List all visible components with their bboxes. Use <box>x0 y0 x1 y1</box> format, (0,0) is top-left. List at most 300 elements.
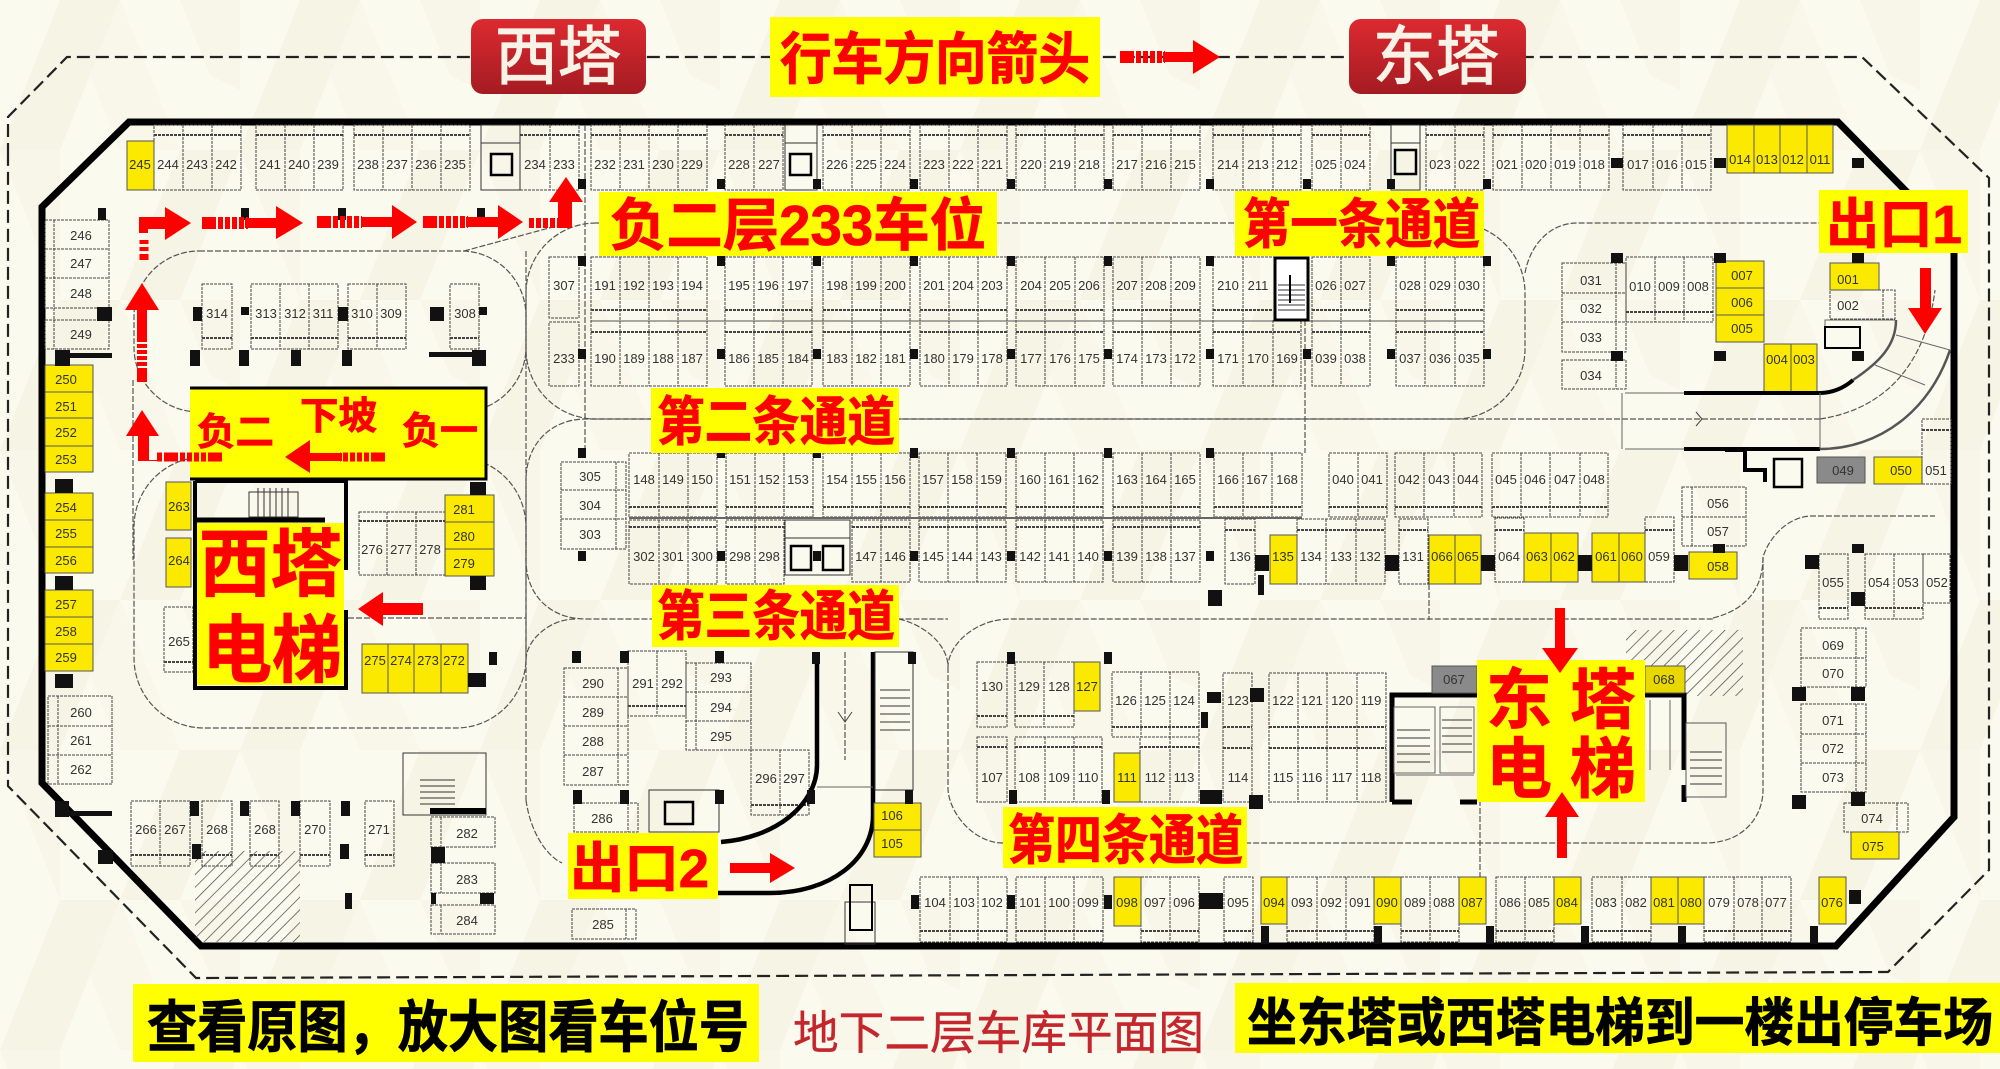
parking double row: 307-030 and 233-035: 171 <box>1217 351 1239 366</box>
parking column: west wall 246-262: 251 <box>55 399 77 414</box>
parking row: 305-048: 151 <box>729 472 751 487</box>
parking row: 302-059: 064 <box>1498 549 1520 564</box>
parking double row: 307-030 and 233-035: 177 <box>1020 351 1042 366</box>
parking double row: 307-030 and 233-035: 186 <box>728 351 750 366</box>
parking block: 114-123: 120 <box>1331 693 1353 708</box>
parking row: 302-059: 147 <box>855 549 877 564</box>
parking island: 308-314: 313 <box>255 306 277 321</box>
parking double row: 307-030 and 233-035: 188 <box>652 351 674 366</box>
parking double row: 307-030 and 233-035: 187 <box>681 351 703 366</box>
parking row: top 245-011: 238 <box>357 157 379 172</box>
parking area: west tower 263-281: 265 <box>168 634 190 649</box>
parking row: top 245-011: 213 <box>1247 157 1269 172</box>
parking island: 308-314: 311 <box>313 306 333 321</box>
parking row: top 245-011: 223 <box>923 157 945 172</box>
parking row: top 245-011: 022 <box>1458 157 1480 172</box>
parking double row: 307-030 and 233-035: 184 <box>787 351 809 366</box>
parking area: east side 049-058, 069-075: 058 <box>1707 559 1729 574</box>
parking row: 305-048: 161 <box>1048 472 1070 487</box>
parking area: east side 049-058, 069-075: 073 <box>1822 770 1844 785</box>
parking row: top 245-011: 023 <box>1429 157 1451 172</box>
parking row: top 245-011: 237 <box>386 157 408 172</box>
parking row: top 245-011: 016 <box>1656 157 1678 172</box>
parking column: west wall 246-262: 247 <box>70 256 92 271</box>
parking row: 305-048: 042 <box>1398 472 1420 487</box>
parking row: 302-059: 062 <box>1553 549 1575 564</box>
parking row: 302-059: 143 <box>980 549 1002 564</box>
parking row: bottom 104-076: 080 <box>1680 895 1702 910</box>
parking area: north-east 001-010, 031-034: 002 <box>1837 298 1859 313</box>
parking row: top 245-011: 224 <box>884 157 906 172</box>
parking row: 302-059: 061 <box>1595 549 1617 564</box>
parking row: 305-048: 304 <box>579 498 601 513</box>
parking area: centre-west 286-297: 295 <box>710 729 732 744</box>
parking area: centre-south 105-130: 106 <box>881 808 903 823</box>
parking area: east side 049-058, 069-075: 070 <box>1822 666 1844 681</box>
parking double row: 307-030 and 233-035: 210 <box>1217 278 1239 293</box>
parking row: 302-059: 298 <box>758 549 780 564</box>
parking row: top 245-011: 024 <box>1344 157 1366 172</box>
parking column: west wall 246-262: 254 <box>55 500 77 515</box>
parking double row: 307-030 and 233-035: 192 <box>623 278 645 293</box>
parking double row: 307-030 and 233-035: 193 <box>652 278 674 293</box>
parking double row: 307-030 and 233-035: 181 <box>884 351 906 366</box>
parking row: 302-059: 136 <box>1229 549 1251 564</box>
parking row: 305-048: 048 <box>1583 472 1605 487</box>
parking double row: 307-030 and 233-035: 029 <box>1429 278 1451 293</box>
parking area: east side 049-058, 069-075: 055 <box>1822 575 1844 590</box>
parking row: 305-048: 045 <box>1495 472 1517 487</box>
parking area: centre-west 286-297: 286 <box>591 811 613 826</box>
parking row: 302-059: 298 <box>729 549 751 564</box>
structural columns <box>55 158 1865 944</box>
parking area: centre-south 105-130: 110 <box>1078 770 1098 785</box>
parking double row: 307-030 and 233-035: 189 <box>623 351 645 366</box>
parking row: 305-048: 167 <box>1246 472 1268 487</box>
parking double row: 307-030 and 233-035: 203 <box>981 278 1003 293</box>
parking row: top 245-011: 018 <box>1583 157 1605 172</box>
parking double row: 307-030 and 233-035: 180 <box>923 351 945 366</box>
parking row: top 245-011: 012 <box>1782 152 1804 167</box>
parking row: 302-059: 060 <box>1621 549 1643 564</box>
parking area: centre-south 105-130: 105 <box>881 836 903 851</box>
parking row: bottom 104-076: 099 <box>1077 895 1099 910</box>
parking double row: 307-030 and 233-035: 190 <box>594 351 616 366</box>
parking row: 302-059: 146 <box>884 549 906 564</box>
parking island: 308-314: 314 <box>206 306 228 321</box>
parking double row: 307-030 and 233-035: 196 <box>757 278 779 293</box>
parking row: top 245-011: 234 <box>524 157 546 172</box>
parking double row: 307-030 and 233-035: 176 <box>1049 351 1071 366</box>
parking area: north-east 001-010, 031-034: 007 <box>1731 268 1753 283</box>
parking row: top 245-011: 019 <box>1554 157 1576 172</box>
parking double row: 307-030 and 233-035: 307 <box>553 278 575 293</box>
parking block: 114-123: 119 <box>1361 693 1381 708</box>
label: aisle 2: 第二条通道 <box>657 393 895 452</box>
parking row: top 245-011: 243 <box>186 157 208 172</box>
parking area: centre-west 286-297: 294 <box>710 700 732 715</box>
parking double row: 307-030 and 233-035: 028 <box>1399 278 1421 293</box>
parking row: 305-048: 160 <box>1019 472 1041 487</box>
parking row: 305-048: 305 <box>579 469 601 484</box>
parking island: 308-314: 312 <box>284 306 306 321</box>
label: east tower lift: 东塔 <box>1486 663 1636 737</box>
parking row: top 245-011: 013 <box>1756 152 1778 167</box>
parking row: bottom 104-076: 086 <box>1499 895 1521 910</box>
parking row: 305-048: 159 <box>980 472 1002 487</box>
parking area: centre-south 105-130: 129 <box>1018 679 1040 694</box>
parking double row: 307-030 and 233-035: 036 <box>1429 351 1451 366</box>
parking row: 305-048: 162 <box>1077 472 1099 487</box>
parking area: east side 049-058, 069-075: 054 <box>1868 575 1890 590</box>
parking area: west tower 263-281: 276 <box>361 542 383 557</box>
parking area: west tower 263-281: 280 <box>453 529 475 544</box>
parking row: 305-048: 040 <box>1332 472 1354 487</box>
parking double row: 307-030 and 233-035: 204 <box>952 278 974 293</box>
parking area: centre-south 105-130: 124 <box>1173 693 1195 708</box>
parking double row: 307-030 and 233-035: 039 <box>1315 351 1337 366</box>
parking column: west wall 246-262: 259 <box>55 650 77 665</box>
parking area: north-east 001-010, 031-034: 008 <box>1687 279 1709 294</box>
route arrow: corner turn <box>139 207 191 260</box>
parking row: top 245-011: 229 <box>681 157 703 172</box>
parking row: 305-048: 164 <box>1145 472 1167 487</box>
parking area: west tower 263-281: 273 <box>417 653 439 668</box>
parking row: 305-048: 155 <box>855 472 877 487</box>
parking double row: 307-030 and 233-035: 183 <box>826 351 848 366</box>
parking double row: 307-030 and 233-035: 207 <box>1116 278 1138 293</box>
parking row: 302-059: 065 <box>1457 549 1479 564</box>
parking row: top 245-011: 232 <box>594 157 616 172</box>
parking row: 305-048: 163 <box>1116 472 1138 487</box>
parking area: centre-west 286-297: 289 <box>582 705 604 720</box>
parking column: west wall 246-262: 257 <box>55 597 77 612</box>
parking area: centre-west 286-297 <box>564 651 809 832</box>
parking area: east side 049-058, 069-075: 056 <box>1707 496 1729 511</box>
parking area: west tower 263-281: 264 <box>168 553 190 568</box>
parking row: 305-048: 156 <box>884 472 906 487</box>
parking row: top 245-011: 011 <box>1810 152 1830 167</box>
parking area: south-west 266-284: 283 <box>456 872 478 887</box>
parking row: bottom 104-076: 096 <box>1173 895 1195 910</box>
parking area: east side 049-058, 069-075: 051 <box>1925 463 1947 478</box>
parking area: north-east 001-010, 031-034 <box>1562 257 1895 392</box>
label: east tower lift: 电梯 <box>1486 732 1636 806</box>
parking row: 302-059: 134 <box>1300 549 1322 564</box>
parking double row: 307-030 and 233-035: 200 <box>884 278 906 293</box>
parking row: bottom 104-076: 103 <box>953 895 975 910</box>
parking area: north-east 001-010, 031-034: 032 <box>1580 301 1602 316</box>
arrow: to west tower lift <box>358 592 423 626</box>
legend arrow <box>1120 40 1220 74</box>
parking area: east side 049-058, 069-075: 053 <box>1897 575 1919 590</box>
parking double row: 307-030 and 233-035: 174 <box>1116 351 1138 366</box>
label: west tower lift: 电梯 <box>202 609 342 692</box>
parking row: top 245-011: 240 <box>288 157 310 172</box>
parking row: top 245-011: 219 <box>1049 157 1071 172</box>
parking area: west tower 263-281: 279 <box>453 556 475 571</box>
parking area: centre-south 105-130: 109 <box>1048 770 1070 785</box>
parking row: 305-048: 168 <box>1276 472 1298 487</box>
parking row: 305-048: 154 <box>826 472 848 487</box>
parking area: centre-west 286-297: 290 <box>582 676 604 691</box>
parking double row: 307-030 and 233-035: 173 <box>1145 351 1167 366</box>
parking double row: 307-030 and 233-035: 172 <box>1174 351 1196 366</box>
parking row: top 245-011: 245 <box>129 157 151 172</box>
parking row: top 245-011: 230 <box>652 157 674 172</box>
parking row: bottom 104-076: 102 <box>981 895 1003 910</box>
parking area: east side 049-058, 069-075: 052 <box>1926 575 1948 590</box>
parking row: bottom 104-076: 090 <box>1376 895 1398 910</box>
lift and stair cores <box>195 125 1802 944</box>
parking row: 302-059: 133 <box>1330 549 1352 564</box>
parking area: north-east 001-010, 031-034: 006 <box>1731 295 1753 310</box>
parking row: top 245-011: 021 <box>1496 157 1518 172</box>
parking column: west wall 246-262: 249 <box>70 327 92 342</box>
parking column: west wall 246-262: 248 <box>70 286 92 301</box>
east tower badge <box>1349 19 1526 94</box>
parking area: north-east 001-010, 031-034: 003 <box>1793 352 1815 367</box>
parking row: top 245-011: 225 <box>855 157 877 172</box>
parking double row: 307-030 and 233-035: 026 <box>1315 278 1337 293</box>
parking area: west tower 263-281: 281 <box>453 502 475 517</box>
route arrow: up from ramp <box>125 283 159 383</box>
parking row: 305-048: 165 <box>1174 472 1196 487</box>
parking area: east side 049-058, 069-075: 072 <box>1822 741 1844 756</box>
parking area: west tower 263-281: 263 <box>168 499 190 514</box>
parking area: centre-south 105-130: 113 <box>1174 770 1194 785</box>
parking row: top 245-011 <box>127 125 1833 190</box>
parking area: south-west 266-284: 266 <box>135 822 157 837</box>
parking row: bottom 104-076: 101 <box>1019 895 1041 910</box>
parking column: west wall 246-262: 260 <box>70 705 92 720</box>
parking row: bottom 104-076: 081 <box>1653 895 1675 910</box>
parking row: bottom 104-076: 084 <box>1556 895 1578 910</box>
parking row: top 245-011: 236 <box>415 157 437 172</box>
parking double row: 307-030 and 233-035: 027 <box>1344 278 1366 293</box>
parking double row: 307-030 and 233-035: 169 <box>1276 351 1298 366</box>
parking area: north-east 001-010, 031-034: 001 <box>1837 272 1859 287</box>
parking column: west wall 246-262 <box>45 220 112 784</box>
parking column: west wall 246-262: 258 <box>55 624 77 639</box>
parking row: top 245-011: 226 <box>826 157 848 172</box>
parking row: 305-048: 149 <box>662 472 684 487</box>
label: west tower lift: 西塔 <box>199 523 342 606</box>
parking double row: 307-030 and 233-035: 182 <box>855 351 877 366</box>
parking row: 305-048: 166 <box>1217 472 1239 487</box>
parking double row: 307-030 and 233-035: 199 <box>855 278 877 293</box>
parking area: centre-south 105-130: 126 <box>1115 693 1137 708</box>
parking area: east side 049-058, 069-075: 071 <box>1822 713 1844 728</box>
parking row: bottom 104-076: 082 <box>1625 895 1647 910</box>
parking double row: 307-030 and 233-035: 201 <box>923 278 945 293</box>
parking row: 302-059: 145 <box>922 549 944 564</box>
parking area: south-west 266-284: 267 <box>164 822 186 837</box>
parking block: 114-123: 121 <box>1301 693 1323 708</box>
parking row: 302-059: 059 <box>1648 549 1670 564</box>
parking row: top 245-011: 244 <box>157 157 179 172</box>
parking row: 305-048: 148 <box>633 472 655 487</box>
parking row: 305-048: 046 <box>1524 472 1546 487</box>
parking row: 302-059: 141 <box>1048 549 1070 564</box>
parking column: west wall 246-262: 262 <box>70 762 92 777</box>
parking area: west tower 263-281 <box>164 482 494 693</box>
parking area: east side 049-058, 069-075 <box>1682 419 1951 859</box>
parking row: top 245-011: 214 <box>1217 157 1239 172</box>
parking row: 305-048: 044 <box>1457 472 1479 487</box>
parking row: bottom 104-076: 085 <box>1528 895 1550 910</box>
parking row: bottom 104-076: 097 <box>1144 895 1166 910</box>
parking column: west wall 246-262: 252 <box>55 425 77 440</box>
parking area: south-west 266-284: 284 <box>456 913 478 928</box>
parking double row: 307-030 and 233-035: 191 <box>594 278 616 293</box>
parking double row: 307-030 and 233-035: 038 <box>1344 351 1366 366</box>
parking block: 114-123: 114 <box>1228 770 1248 785</box>
parking area: centre-south 105-130: 130 <box>981 679 1003 694</box>
parking row: bottom 104-076: 100 <box>1048 895 1070 910</box>
label: west tower lift <box>197 523 344 692</box>
hatched zones <box>195 630 1743 942</box>
parking row: top 245-011: 228 <box>728 157 750 172</box>
arrow: exit 1 <box>1908 268 1942 334</box>
parking area: south-west 266-284: 268 <box>206 822 228 837</box>
parking area: south-west 266-284: 270 <box>304 822 326 837</box>
parking row: 305-048: 152 <box>758 472 780 487</box>
parking row: bottom 104-076: 088 <box>1433 895 1455 910</box>
parking row: top 245-011: 239 <box>317 157 339 172</box>
label: exit 2: 出口2 <box>570 839 709 899</box>
parking area: centre-west 286-297: 297 <box>783 771 805 786</box>
parking area: west tower 263-281: 277 <box>390 542 412 557</box>
parking row: 305-048: 303 <box>579 527 601 542</box>
parking double row: 307-030 and 233-035: 197 <box>787 278 809 293</box>
parking row: 305-048: 153 <box>787 472 809 487</box>
parking column: west wall 246-262: 250 <box>55 372 77 387</box>
parking area: centre-west 286-297: 292 <box>661 676 683 691</box>
parking row: top 245-011: 231 <box>623 157 645 172</box>
parking row: 302-059: 140 <box>1077 549 1099 564</box>
parking row: 302-059: 132 <box>1359 549 1381 564</box>
parking row: top 245-011: 017 <box>1627 157 1649 172</box>
parking row: 302-059: 300 <box>691 549 713 564</box>
parking area: east side 049-058, 069-075: 074 <box>1861 811 1883 826</box>
label: exit 1: 出口1 <box>1826 195 1962 255</box>
parking row: top 245-011: 218 <box>1078 157 1100 172</box>
parking area: north-east 001-010, 031-034: 005 <box>1731 321 1753 336</box>
parking double row: 307-030 and 233-035: 198 <box>826 278 848 293</box>
parking row: 305-048: 041 <box>1361 472 1383 487</box>
parking double row: 307-030 and 233-035: 185 <box>757 351 779 366</box>
parking area: west tower 263-281: 272 <box>443 653 465 668</box>
parking area: north-east 001-010, 031-034: 009 <box>1658 279 1680 294</box>
label: aisle 3: 第三条通道 <box>657 587 895 647</box>
parking double row: 307-030 and 233-035 <box>549 257 1484 386</box>
parking area: centre-west 286-297: 293 <box>710 670 732 685</box>
parking double row: 307-030 and 233-035: 037 <box>1399 351 1421 366</box>
parking row: bottom 104-076: 093 <box>1291 895 1313 910</box>
parking row: top 245-011: 015 <box>1685 157 1707 172</box>
parking column: west wall 246-262: 253 <box>55 452 77 467</box>
label: parking space 233: 负二层233车位 <box>610 194 986 258</box>
parking row: 302-059: 138 <box>1145 549 1167 564</box>
parking area: east side 049-058, 069-075: 057 <box>1707 524 1729 539</box>
parking row: top 245-011: 014 <box>1729 152 1751 167</box>
route arrow: turn into space 233 <box>529 177 583 228</box>
parking area: centre-west 286-297: 291 <box>632 676 654 691</box>
footer note: view original image: 查看原图，放大图看车位号 <box>147 996 749 1059</box>
parking double row: 307-030 and 233-035: 170 <box>1247 351 1269 366</box>
panel: ramp down <box>126 388 486 479</box>
parking row: bottom 104-076 <box>920 877 1846 942</box>
parking row: bottom 104-076: 083 <box>1595 895 1617 910</box>
parking area: south-west 266-284: 285 <box>592 917 614 932</box>
label: aisle 1: 第一条通道 <box>1243 195 1480 255</box>
staircase between 211 and 026 <box>1275 258 1308 320</box>
parking area: centre-west 286-297: 287 <box>582 764 604 779</box>
parking double row: 307-030 and 233-035: 179 <box>952 351 974 366</box>
parking area: west tower 263-281: 274 <box>390 653 412 668</box>
east tower badge: 东塔 <box>1373 21 1499 93</box>
parking row: 305-048: 047 <box>1554 472 1576 487</box>
parking double row: 307-030 and 233-035: 208 <box>1145 278 1167 293</box>
parking area: centre-south 105-130: 128 <box>1048 679 1070 694</box>
parking row: 302-059: 137 <box>1174 549 1196 564</box>
route arrow: eastbound 1 <box>202 206 303 239</box>
east tower core <box>1392 666 1726 802</box>
panel: ramp down: 下坡 <box>300 396 377 438</box>
parking area: south-west 266-284 <box>131 801 636 939</box>
parking row: top 245-011: 212 <box>1276 157 1298 172</box>
parking area: east side 049-058, 069-075: 075 <box>1862 839 1884 854</box>
parking area: north-east 001-010, 031-034: 031 <box>1580 273 1602 288</box>
parking block: 114-123: 116 <box>1302 770 1322 785</box>
parking area: north-east 001-010, 031-034: 010 <box>1629 279 1651 294</box>
parking row: bottom 104-076: 098 <box>1116 895 1138 910</box>
parking row: top 245-011: 235 <box>444 157 466 172</box>
parking row: bottom 104-076: 095 <box>1227 895 1249 910</box>
exit 2 curved ramp <box>718 652 873 893</box>
parking row: 302-059 <box>629 517 1674 584</box>
parking block: 114-123: 118 <box>1361 770 1381 785</box>
parking row: top 245-011: 220 <box>1020 157 1042 172</box>
parking area: north-east 001-010, 031-034: 033 <box>1580 330 1602 345</box>
parking area: south-west 266-284: 268 <box>254 822 276 837</box>
parking double row: 307-030 and 233-035: 035 <box>1458 351 1480 366</box>
parking island: 308-314: 309 <box>380 306 402 321</box>
parking block: 114-123 <box>1223 673 1386 802</box>
east tower core: 067 <box>1443 672 1465 687</box>
parking area: centre-south 105-130: 111 <box>1117 770 1137 785</box>
parking double row: 307-030 and 233-035: 211 <box>1248 278 1268 293</box>
parking row: top 245-011: 242 <box>215 157 237 172</box>
parking island: 308-314: 308 <box>454 306 476 321</box>
parking double row: 307-030 and 233-035: 175 <box>1078 351 1100 366</box>
parking area: centre-south 105-130 <box>874 662 1199 857</box>
parking double row: 307-030 and 233-035: 195 <box>728 278 750 293</box>
parking row: bottom 104-076: 078 <box>1737 895 1759 910</box>
parking double row: 307-030 and 233-035: 205 <box>1049 278 1071 293</box>
parking island: 308-314: 310 <box>351 306 373 321</box>
arrow: down to east tower lift <box>1542 608 1578 673</box>
parking row: 302-059: 301 <box>662 549 684 564</box>
parking row: top 245-011: 025 <box>1315 157 1337 172</box>
parking area: west tower 263-281: 278 <box>419 542 441 557</box>
east tower core: 068 <box>1653 672 1675 687</box>
driving lanes <box>133 125 1935 880</box>
parking area: south-west 266-284: 282 <box>456 826 478 841</box>
parking row: top 245-011: 221 <box>981 157 1003 172</box>
parking row: bottom 104-076: 104 <box>924 895 946 910</box>
